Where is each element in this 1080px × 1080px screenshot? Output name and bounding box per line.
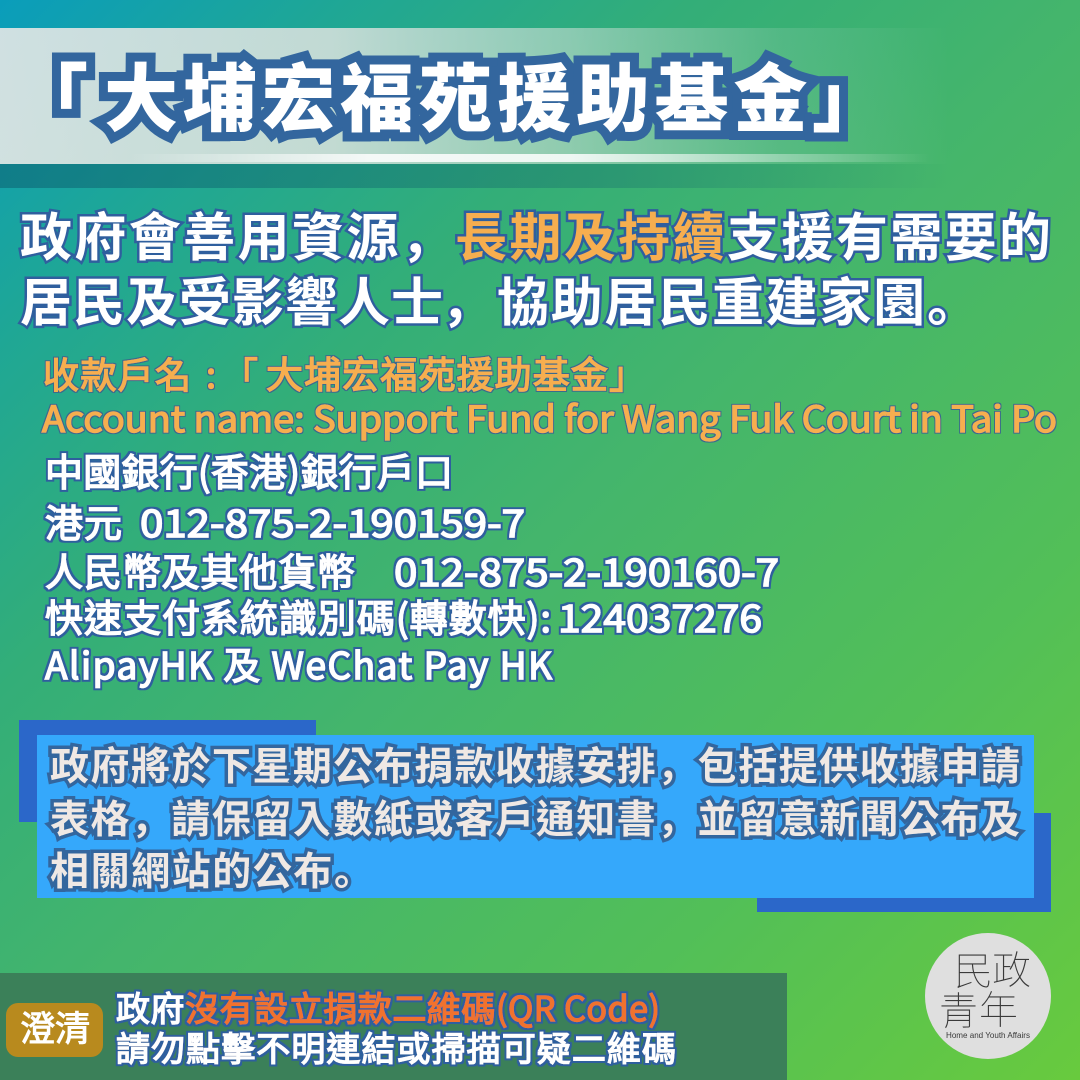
callout text: 表格，請保留入數紙或客戶通知書，並留意新聞公布及 [50, 789, 1020, 845]
account name: 收款戶名 [43, 347, 191, 399]
bank details: 124037276 [558, 588, 762, 643]
logo: Home and Youth Affairs: 政 [992, 940, 1031, 996]
headline statement: 政府會善用資源，長期及持續支援有需要的 [20, 196, 1051, 271]
headline statement: 協助居民重建家園。 [497, 261, 979, 336]
logo: Home and Youth Affairs [925, 933, 1051, 1059]
callout text [50, 736, 1020, 897]
callout text: 相關網站的公布。 [50, 841, 373, 897]
title: 「 [14, 40, 88, 147]
logo: Home and Youth Affairs: 青 [939, 981, 978, 1037]
callout back block top-left [19, 720, 316, 822]
logo: Home and Youth Affairs: 年 [979, 980, 1018, 1036]
callout: receipt arrangement [19, 720, 1051, 912]
banner band [0, 28, 950, 164]
callout back block bottom-right [757, 813, 1051, 912]
clarification text: 政府沒有設立捐款二維碼(QR Code) [116, 982, 660, 1031]
clarification bar [0, 973, 787, 1080]
account name: 「 [222, 347, 258, 399]
bank details: 快速支付系統識別碼(轉數快): [45, 588, 551, 643]
bank details: 中國銀行(香港)銀行戶口 [45, 442, 453, 497]
callout panel [37, 735, 1034, 898]
account name: 大埔宏福苑援助基金」 [266, 345, 646, 399]
account name [42, 345, 1057, 443]
title: 大埔宏福苑援助基金」 [104, 40, 886, 147]
bank details: 人民幣及其他貨幣 [45, 542, 355, 597]
bar background [0, 973, 787, 1080]
clarification text [116, 982, 676, 1071]
headline statement: 居民及受影響人士 [20, 275, 443, 333]
account name: : [206, 347, 216, 399]
banner lower shadow [0, 164, 950, 188]
badge [6, 1001, 103, 1057]
logo: Home and Youth Affairs: Home and Youth Affairs [946, 1031, 1030, 1040]
bank details: AlipayHK 及 WeChat Pay HK [45, 636, 552, 690]
clarification text: 請勿點擊不明連結或掃描可疑二維碼 [116, 1022, 676, 1071]
bank details: 港元 [45, 493, 122, 548]
logo: Home and Youth Affairs: 民 [954, 941, 993, 997]
callout text: 政府將於下星期公布捐款收據安排，包括提供收據申請 [50, 736, 1020, 792]
headline statement: ， [441, 261, 493, 336]
bank details: 012-875-2-190159-7 [140, 493, 525, 548]
bank details [45, 442, 779, 690]
bank details: 012-875-2-190160-7 [394, 542, 779, 597]
badge: 澄清 [20, 1001, 90, 1052]
account name: Account name: Support Fund for Wang Fuk Court in Tai Po [42, 391, 1057, 443]
banner glow line [130, 154, 930, 162]
headline statement [20, 196, 1051, 336]
title banner [0, 28, 950, 188]
